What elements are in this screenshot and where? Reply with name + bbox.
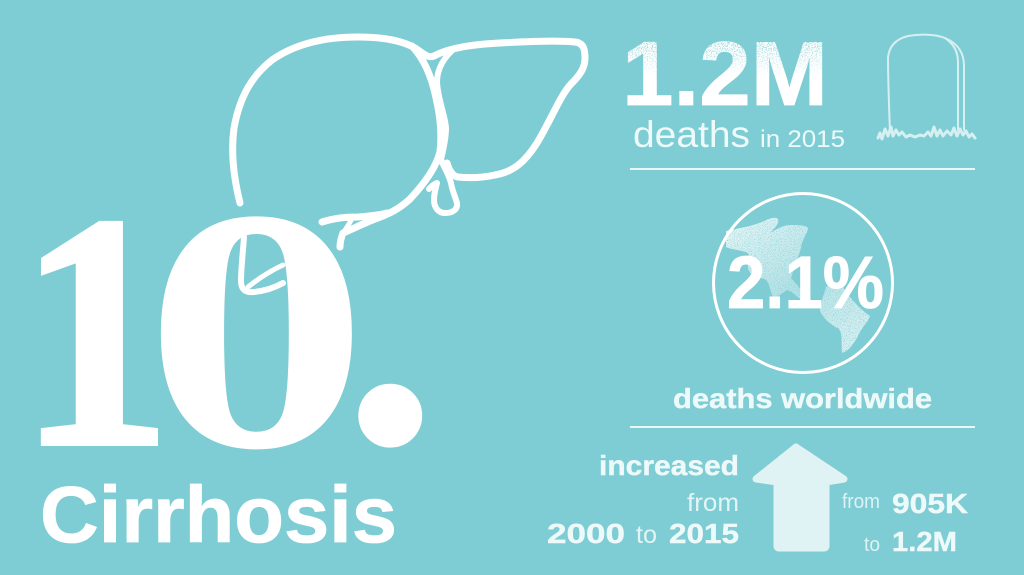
heading: Cirrhosis: Cirrhosis (40, 470, 397, 559)
stat: 1.2M deaths in 2015: deaths (633, 114, 750, 155)
text: from 905K to 1.2M: from (842, 491, 880, 513)
stat: 1.2M deaths in 2015 (627, 41, 844, 148)
text: increased from 2000 to 2015: increased (599, 450, 739, 481)
text: from 905K to 1.2M: 905K (892, 488, 968, 519)
text: from 905K to 1.2M: to (864, 534, 880, 556)
big number: 10. (18, 92, 440, 528)
stat: 1.2M deaths in 2015: 1.2M (622, 24, 828, 125)
stat: 1.2M deaths in 2015: in 2015 (760, 126, 845, 153)
label: deaths worldwide: deaths worldwide (673, 383, 932, 414)
stippled fade on top of the figure (628, 41, 822, 74)
text: increased from 2000 to 2015 (547, 450, 739, 549)
text: from 905K to 1.2M: 1.2M (892, 526, 957, 557)
stat: 2.1%: 2.1% (727, 241, 884, 324)
globe: circle with continents (714, 194, 892, 372)
icon: up arrow (756, 447, 844, 548)
continent: North America (726, 218, 808, 302)
divider top (630, 168, 975, 170)
icon: tombstone with grass (878, 35, 975, 139)
text: increased from 2000 to 2015: 2000 (547, 518, 625, 549)
text: from 905K to 1.2M (842, 488, 968, 557)
big number: 10.: 0 (146, 155, 367, 518)
continent: South America (820, 283, 870, 353)
divider bottom (630, 426, 975, 428)
icon: liver outline (233, 37, 585, 292)
big number: 10.: 1 (18, 145, 172, 517)
big number: 10.: . (341, 92, 440, 528)
text: increased from 2000 to 2015: to (636, 521, 657, 549)
text: increased from 2000 to 2015: 2015 (669, 518, 739, 549)
text: increased from 2000 to 2015: from (687, 489, 739, 517)
